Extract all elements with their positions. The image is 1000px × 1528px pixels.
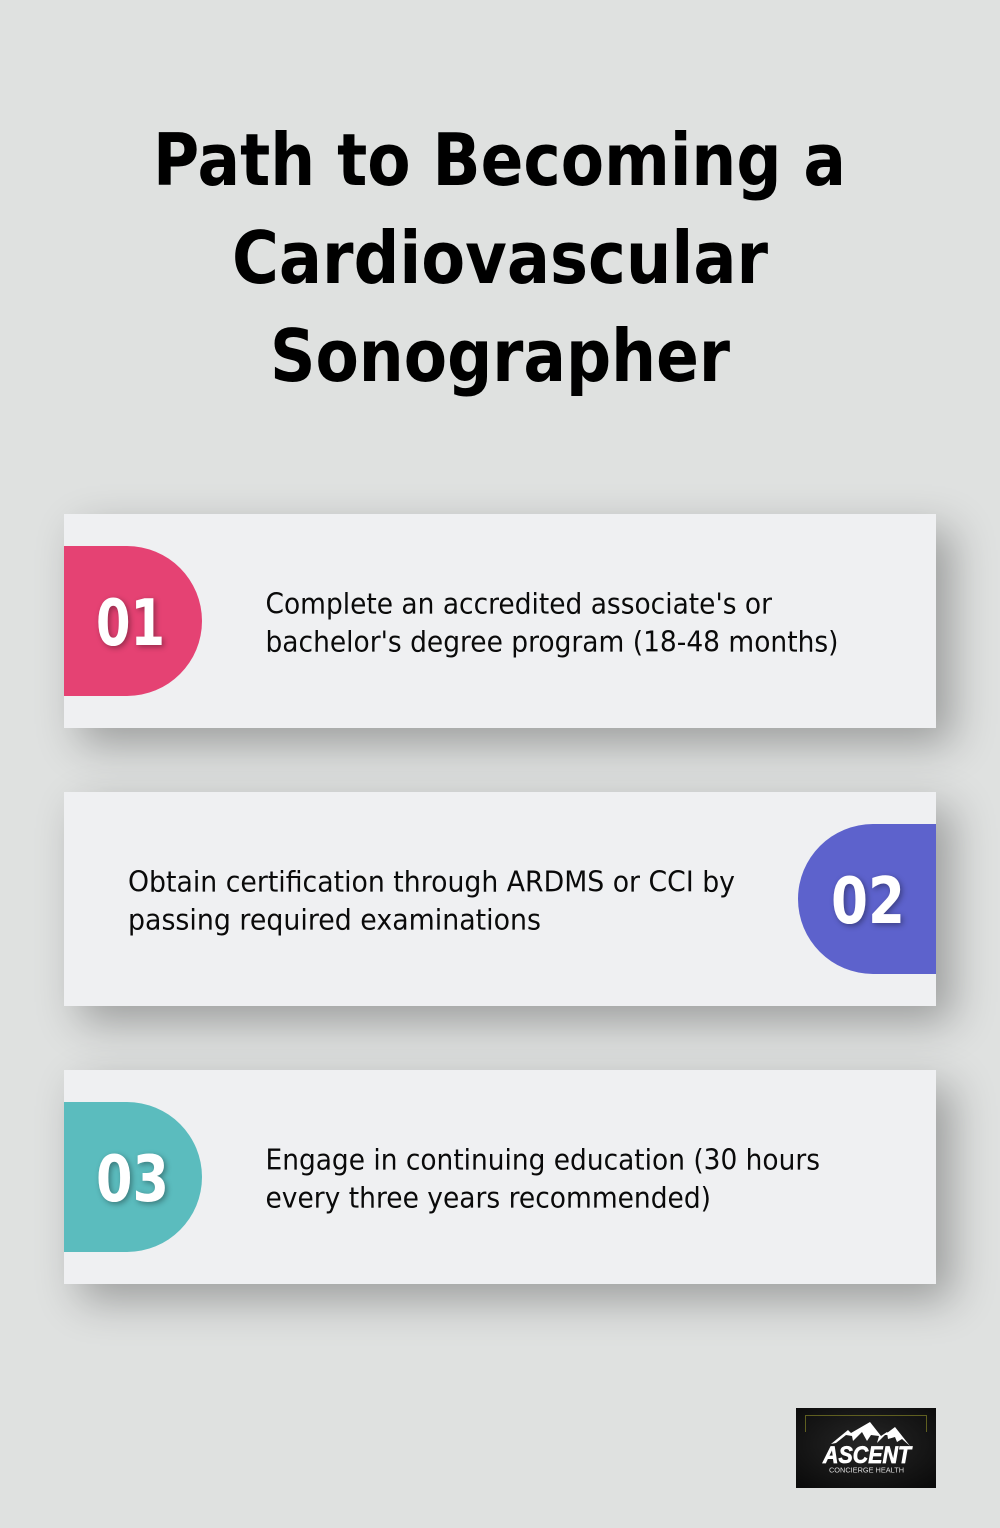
panel: step 03 [64,1070,936,1284]
badge: 03 [64,1102,202,1252]
text: step 02 description: passing required examinations [128,904,541,936]
badge: 02: 02 [831,865,905,939]
text: step 01 description: bachelor's degree program (18-48 months) [266,626,838,658]
panel: step 01 [64,514,936,728]
text: step 01 description [266,588,838,658]
text: step 03 description [266,1144,820,1214]
badge: 02 [798,824,936,974]
title: Cardiovascular [232,216,768,300]
badge: 01 [64,546,202,696]
badge: 03: 03 [96,1143,169,1217]
title: Sonographer [270,314,730,398]
text: step 02 description: Obtain certification through ARDMS or CCI by [128,866,735,898]
wordmark: ASCENT [822,1442,913,1469]
title [153,118,846,398]
panel: step 02 [64,792,936,1006]
text: step 03 description: Engage in continuing education (30 hours [266,1144,820,1176]
logo: Ascent Concierge Health [796,1408,936,1488]
badge: 01: 01 [96,587,165,661]
text: step 02 description [128,866,735,936]
text: step 01 description: Complete an accredited associate's or [266,588,772,620]
text: step 03 description: every three years recommended) [266,1182,711,1214]
icon: mountains [831,1422,910,1446]
tagline: CONCIERGE HEALTH [829,1468,904,1474]
title: Path to Becoming a [153,118,846,202]
